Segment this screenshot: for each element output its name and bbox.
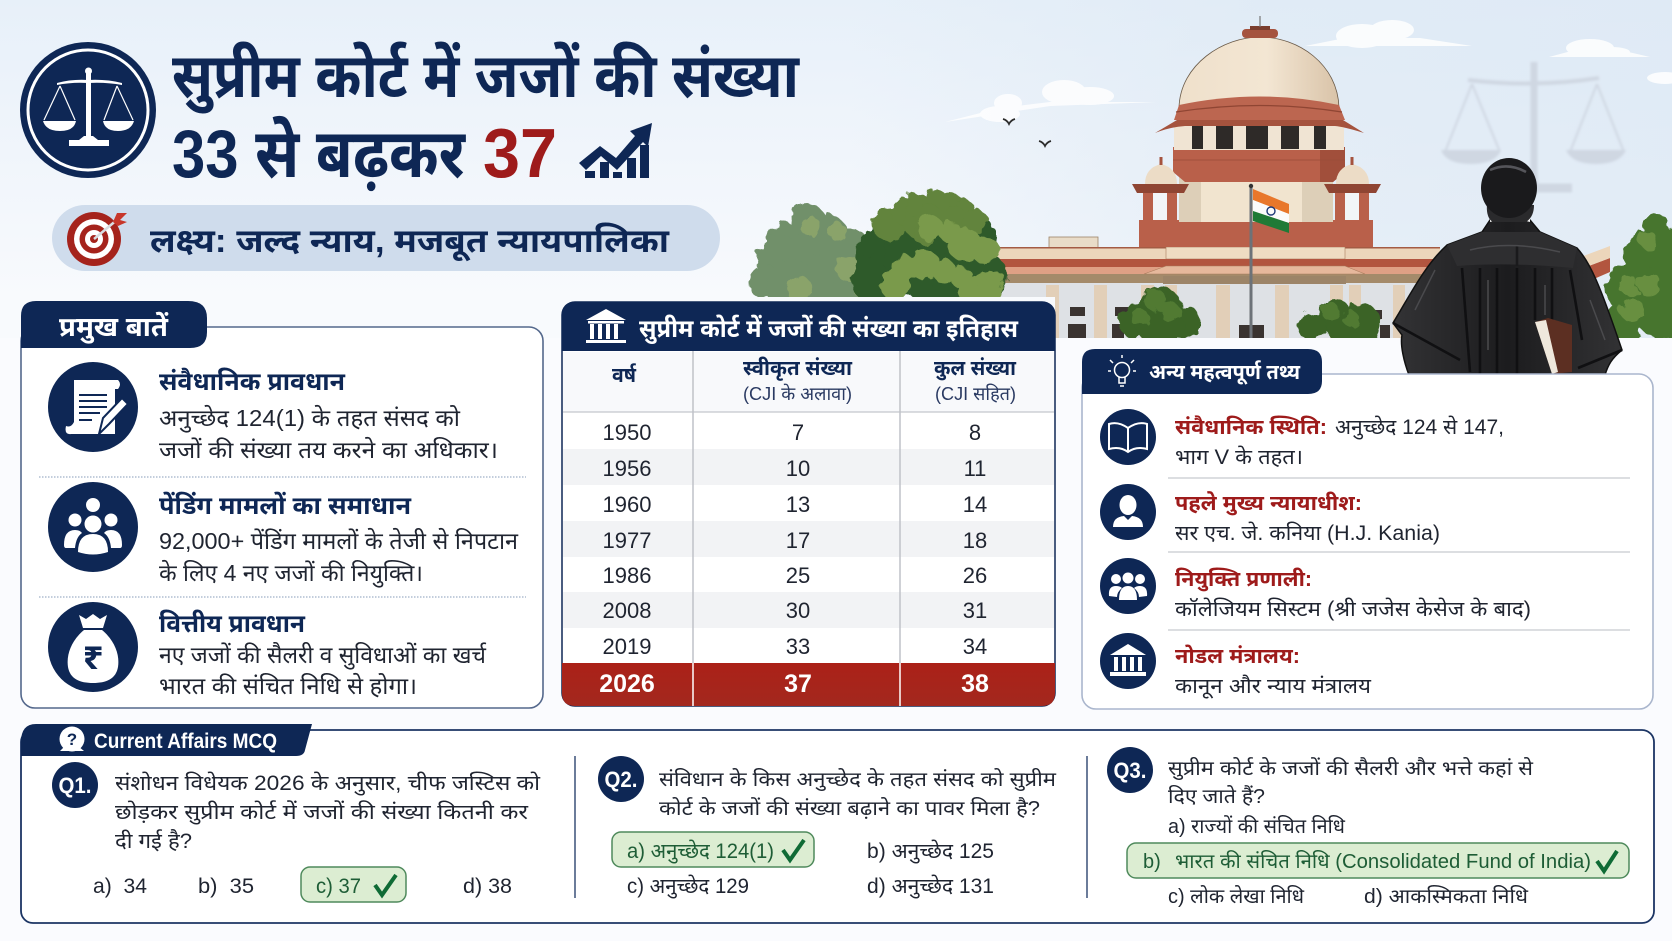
table rows: 13: [786, 492, 810, 517]
highlighted row 2026: 38: [961, 670, 989, 698]
illustration: courthouse building: [973, 16, 1610, 339]
badge Q2: Q2.: [604, 767, 638, 792]
goal pill: लक्ष्य: जल्द न्याय, मजबूत न्यायपालिका: [150, 222, 670, 262]
item: financial provision: भारत की संचित निधि से होगा।: [159, 673, 417, 699]
illustration: shrubs: [1119, 286, 1381, 347]
fact: appointment system: [1100, 558, 1531, 621]
item: pending cases: [48, 482, 519, 588]
table rows: 1986: [603, 563, 651, 588]
fact: first chief justice: सर एच. जे. कनिया (H.J. Kania): [1175, 521, 1440, 545]
panel: other facts: [1082, 349, 1653, 709]
table rows: 1977: [603, 528, 651, 553]
highlighted row 2026: 2026: [599, 670, 655, 698]
right chhatri: [1324, 157, 1381, 247]
question 2: कोर्ट के जजों की संख्या बढ़ाने का पावर मिला है?: [659, 795, 1040, 820]
question 3: दिए जाते हैं?: [1168, 784, 1265, 808]
icon: target: [67, 212, 127, 266]
column headers: वर्ष: [612, 363, 637, 387]
question 2: c) अनुच्छेद 129: [627, 874, 749, 899]
illustration: clouds: [945, 20, 1672, 122]
red drum: [1173, 147, 1345, 182]
table rows: 17: [786, 528, 810, 553]
highlighted row 2026: [562, 663, 1055, 706]
windows: [1068, 307, 1390, 338]
icon: money bag: [68, 614, 118, 683]
correct answer b: [1127, 843, 1629, 878]
table rows: 33: [786, 634, 810, 659]
title: 37: [483, 114, 557, 192]
question 1: छोड़कर सुप्रीम कोर्ट में जजों की संख्या कितनी कर: [115, 800, 528, 825]
question 1: a) 34: [93, 875, 147, 898]
heading tab: [1082, 349, 1322, 394]
fact: first chief justice: [1100, 484, 1440, 545]
badge Q3: Q3.: [1114, 758, 1146, 783]
question 1: b) 35: [198, 875, 254, 898]
question 1: संशोधन विधेयक 2026 के अनुसार, चीफ जस्टिस को: [115, 771, 541, 796]
fact: constitutional status: अनुच्छेद 124 से 147,: [1335, 415, 1504, 440]
right wing roof: [1578, 258, 1610, 285]
centre red band: [1179, 222, 1333, 247]
correct answer b: b): [1143, 851, 1161, 873]
table title bar: सुप्रीम कोर्ट में जजों की संख्या का इतिहास: [639, 314, 1019, 344]
icon: ministry building: [1110, 644, 1146, 676]
book: [1535, 318, 1572, 374]
icon: person: [1113, 495, 1143, 527]
item: pending cases: 92,000+ पेंडिंग मामलों के तेजी से निपटान: [159, 528, 519, 554]
eave: [1155, 120, 1364, 133]
correct answer c: [301, 867, 406, 902]
columns: [1046, 285, 1405, 338]
illustration: birds: [1003, 119, 1051, 146]
item: pending cases: पेंडिंग मामलों का समाधान: [159, 491, 412, 520]
porch: [1166, 247, 1345, 259]
fact: nodal ministry: नोडल मंत्रालय:: [1175, 644, 1300, 668]
correct answer c: c) 37: [316, 875, 361, 898]
drum band: [1174, 96, 1345, 120]
icon: court building: [586, 309, 626, 343]
question 1: दी गई है?: [115, 828, 192, 853]
left chhatri: [1132, 157, 1189, 247]
cream drum: [1179, 177, 1333, 222]
table rows: [603, 420, 987, 659]
question 3: सुप्रीम कोर्ट के जजों की सैलरी और भत्ते कहां से: [1168, 755, 1534, 781]
table rows: 18: [963, 528, 987, 553]
table rows: 2019: [603, 634, 651, 659]
question 3: c) लोक लेखा निधि: [1168, 884, 1305, 908]
icon: people group: [64, 498, 122, 554]
question 1: [52, 762, 541, 902]
item: financial provision: नए जजों की सैलरी व सुविधाओं का खर्च: [159, 642, 487, 670]
table title bar: [562, 302, 1055, 351]
table rows: 34: [963, 634, 987, 659]
badge Q3: [1107, 747, 1153, 793]
heading tab: प्रमुख बातें: [59, 311, 169, 343]
item: pending cases: के लिए 4 नए जजों की नियुक्ति।: [159, 560, 423, 588]
fact: constitutional status: [1100, 409, 1504, 469]
item: financial provision: [48, 602, 487, 699]
panel: key points: [21, 301, 543, 708]
table rows: 26: [963, 563, 987, 588]
question 2: [598, 756, 1057, 899]
item: constitutional provision: अनुच्छेद 124(1) के तहत संसद को: [159, 405, 461, 433]
title: 33 से बढ़कर: [172, 116, 467, 192]
table rows: 1956: [603, 456, 651, 481]
question 1: d) 38: [463, 875, 512, 898]
correct answer a: a) अनुच्छेद 124(1): [627, 839, 774, 864]
table rows: 1950: [603, 420, 651, 445]
column headers: कुल संख्या: [934, 356, 1017, 381]
column headers: (CJI के अलावा): [743, 383, 852, 404]
icon: money bag: ₹: [83, 636, 103, 677]
icon: scroll and pen: [66, 380, 128, 434]
column headers: [563, 352, 1054, 412]
fact: appointment system: नियुक्ति प्रणाली:: [1175, 567, 1312, 592]
icon: growth chart arrow: [579, 123, 652, 178]
colonnade: [1174, 124, 1344, 150]
table rows: 11: [964, 456, 986, 481]
wall: [1000, 283, 1440, 339]
logo: scales of justice: [20, 42, 156, 178]
table rows: 1960: [603, 492, 651, 517]
column headers: स्वीकृत संख्या: [743, 356, 853, 381]
table rows: 14: [963, 492, 987, 517]
question 2: संविधान के किस अनुच्छेद के तहत संसद को सुप्रीम: [659, 767, 1057, 792]
question 3: d) आकस्मिकता निधि: [1364, 884, 1529, 908]
column headers: (CJI सहित): [935, 384, 1016, 404]
badge Q1: Q1.: [58, 773, 92, 798]
panel: history table: [562, 302, 1055, 706]
question 2: b) अनुच्छेद 125: [867, 839, 994, 864]
fact: appointment system: कॉलेजियम सिस्टम (श्री जजेस केसेज के बाद): [1175, 597, 1531, 621]
icon: group: [1109, 572, 1147, 600]
correct answer a: [612, 832, 814, 867]
item: financial provision: वित्तीय प्रावधान: [159, 609, 306, 638]
fact: nodal ministry: कानून और न्याय मंत्रालय: [1175, 674, 1372, 699]
title: [172, 41, 801, 192]
fact: first chief justice: पहले मुख्य न्यायाधीश:: [1175, 491, 1362, 516]
title: सुप्रीम कोर्ट में जजों की संख्या: [172, 41, 801, 114]
item: constitutional provision: जजों की संख्या तय करने का अधिकार।: [159, 437, 498, 463]
fact: nodal ministry: [1100, 633, 1372, 699]
table rows: 10: [786, 456, 810, 481]
panel: MCQ: [21, 724, 1654, 923]
icon: question bubble: ?: [67, 730, 77, 749]
question 3: [1107, 747, 1629, 908]
illustration: faint scales: [1441, 62, 1626, 190]
highlighted row 2026: 37: [784, 670, 812, 698]
illustration: flag and pole: [1249, 184, 1289, 338]
table rows: 31: [963, 598, 987, 623]
icon: open book: [1109, 423, 1147, 452]
question 2: d) अनुच्छेद 131: [867, 874, 994, 899]
lower page sheet: [0, 297, 1672, 941]
table rows: 2008: [603, 598, 651, 623]
MCQ heading tab: Current Affairs MCQ: [94, 730, 277, 753]
table rows: 30: [786, 598, 810, 623]
illustration: right tree: [1605, 212, 1672, 340]
badge Q1: [52, 762, 98, 808]
correct answer b: भारत की संचित निधि (Consolidated Fund of India): [1175, 849, 1591, 873]
item: constitutional provision: संवैधानिक प्रावधान: [159, 367, 346, 396]
fact: constitutional status: भाग V के तहत।: [1175, 445, 1303, 469]
question 3: a) राज्यों की संचित निधि: [1168, 814, 1346, 838]
icon: question bubble: [60, 726, 84, 752]
table rows: 8: [969, 420, 981, 445]
table rows: 7: [792, 420, 804, 445]
illustration: judge from behind: [1393, 158, 1622, 375]
MCQ heading tab: [21, 724, 312, 756]
badge Q2: [598, 756, 644, 802]
heading tab: अन्य महत्वपूर्ण तथ्य: [1149, 360, 1301, 385]
dome: [1179, 37, 1339, 108]
heading tab: [21, 301, 207, 348]
fact: constitutional status: संवैधानिक स्थिति:: [1175, 415, 1327, 439]
icon: bulb: [1108, 355, 1136, 386]
goal pill: [52, 205, 720, 271]
item: constitutional provision: [48, 362, 498, 463]
table rows: 25: [786, 563, 810, 588]
illustration: left trees: [748, 189, 1007, 311]
